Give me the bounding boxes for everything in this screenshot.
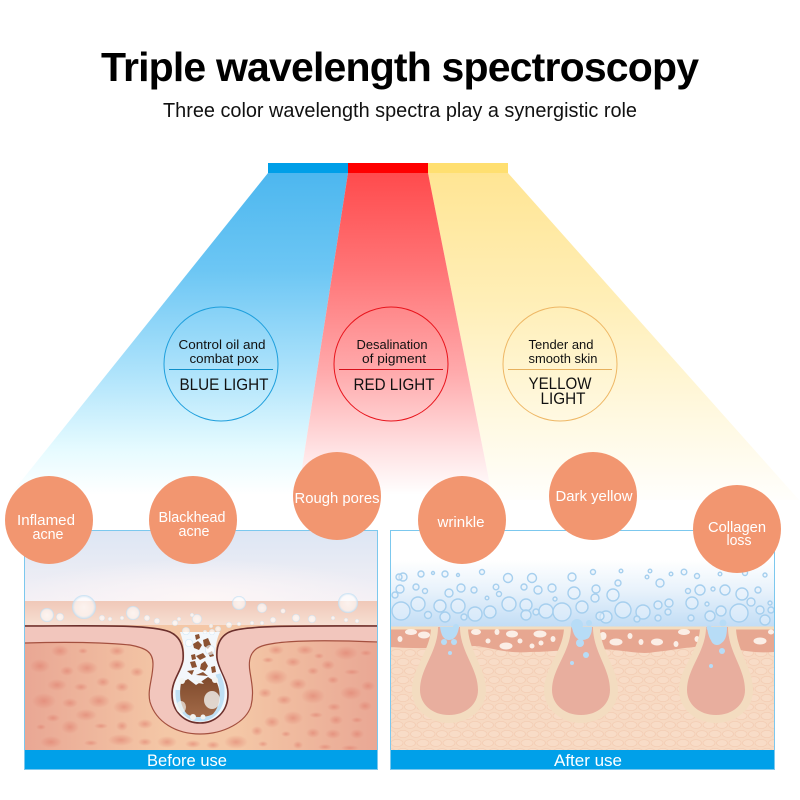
follicle 2 xyxy=(544,627,618,723)
dermis band xyxy=(391,627,774,653)
blue light circle xyxy=(164,307,278,421)
badge: dark yellow xyxy=(549,452,637,540)
badge: dark yellow: Dark yellow xyxy=(556,489,633,505)
light source bar xyxy=(268,163,508,173)
band ovals xyxy=(398,629,774,650)
sky background xyxy=(25,531,377,602)
panel border xyxy=(24,530,378,770)
badge: collagen loss xyxy=(693,485,781,573)
badge: inflamed acne: Inflamed xyxy=(17,513,75,529)
yellow light circle: YELLOW xyxy=(528,374,592,393)
after use bar xyxy=(391,750,774,769)
panel: after use xyxy=(390,530,774,770)
tissue spots xyxy=(30,645,375,751)
before use label: Before use xyxy=(147,751,227,770)
yellow light circle xyxy=(503,307,617,421)
light beams xyxy=(6,173,799,500)
follicle 1 xyxy=(412,627,486,723)
badge: blackhead acne xyxy=(149,476,237,564)
skin surface layer with pore wall xyxy=(24,626,378,734)
yellow light circle: Tender and xyxy=(528,337,594,352)
skin surface band xyxy=(25,601,377,625)
foam bubbles xyxy=(40,593,359,655)
badge: blackhead acne: Blackhead xyxy=(158,510,226,526)
panel border xyxy=(390,530,774,770)
blue light circle: BLUE LIGHT xyxy=(180,375,268,394)
badge: wrinkle: wrinkle xyxy=(436,515,484,531)
follicle 3 xyxy=(679,627,753,723)
deep skin tissue xyxy=(25,625,377,750)
red light circle: of pigment xyxy=(362,351,426,366)
yellow light circle: LIGHT xyxy=(540,389,586,408)
pore cavity xyxy=(173,632,227,722)
pore bubble rim xyxy=(178,674,222,719)
badge: collagen loss: loss xyxy=(726,533,752,549)
red light circle xyxy=(334,307,448,421)
droplets entering follicles xyxy=(440,619,727,668)
dermis outline xyxy=(24,641,378,734)
yellow light circle: smooth skin xyxy=(528,351,598,366)
before use bar xyxy=(25,750,377,769)
blackhead fragments xyxy=(187,634,216,676)
after use label: After use xyxy=(554,751,622,770)
cell tissue xyxy=(391,640,774,750)
title: Triple wavelength spectroscopy xyxy=(101,44,699,90)
blue light circle: combat pox xyxy=(190,351,259,366)
foam bubbles xyxy=(392,569,774,625)
sky glow xyxy=(144,579,259,601)
blue light circle: Control oil and xyxy=(178,337,266,352)
red light circle: RED LIGHT xyxy=(354,375,434,394)
badge: blackhead acne: acne xyxy=(178,524,210,540)
badge: rough pores xyxy=(293,452,381,540)
badge: inflamed acne: acne xyxy=(32,527,64,543)
subtitle: Three color wavelength spectra play a synergistic role xyxy=(163,100,637,122)
white highlights in plug xyxy=(176,677,220,720)
panel: before use xyxy=(24,530,378,770)
badge: inflamed acne xyxy=(5,476,93,564)
badge: wrinkle xyxy=(418,476,506,564)
skin surface outline xyxy=(24,626,378,723)
red light circle: Desalination xyxy=(356,337,428,352)
badge: collagen loss: Collagen xyxy=(708,520,766,536)
surface line xyxy=(391,626,774,630)
badge: rough pores: Rough pores xyxy=(294,491,380,507)
blackhead plug xyxy=(180,677,220,717)
sky background xyxy=(391,571,774,626)
